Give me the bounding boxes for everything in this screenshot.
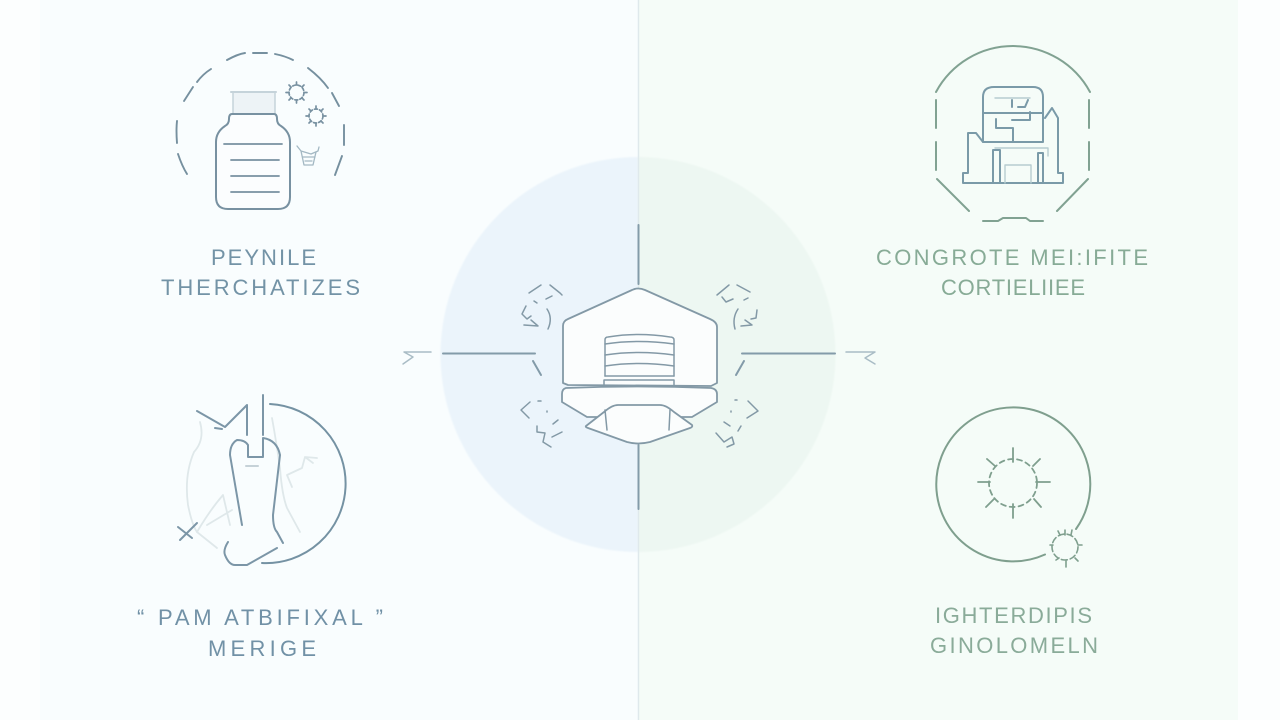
- label: bottom right: GINOLOMELN: [930, 633, 1098, 658]
- crown strokes: [197, 395, 263, 435]
- panel: left background: [40, 0, 638, 720]
- dashed ring: [176, 53, 344, 175]
- icon: jar in dashed circle: [176, 53, 344, 209]
- label: bottom left: [137, 605, 383, 661]
- gear two: [306, 106, 326, 126]
- panel: right background: [639, 0, 1238, 720]
- center divider: [638, 0, 640, 720]
- label: bottom right: [930, 603, 1098, 658]
- jar lines: [224, 144, 282, 192]
- label: top left: PEYNILE: [211, 245, 316, 270]
- ring arc: [936, 407, 1090, 561]
- label: top right: [876, 245, 1148, 300]
- building: [963, 87, 1063, 183]
- house shape: [562, 288, 717, 444]
- ring segments: [936, 46, 1090, 221]
- inner faint lines: [995, 98, 1048, 183]
- sun rays: [978, 448, 1050, 518]
- small sun: [1050, 530, 1082, 567]
- right sparks: [716, 285, 758, 447]
- label: top left: [161, 245, 360, 300]
- central sun: [989, 459, 1037, 507]
- label: top right: CONGROTE MEI:IFITE: [876, 245, 1148, 270]
- label: top right: CORTIELIIEE: [941, 275, 1085, 300]
- circle arc: [262, 404, 346, 563]
- icon: building in ring: [936, 46, 1090, 221]
- stacked block: [604, 334, 674, 430]
- panel: top right item: [876, 46, 1148, 300]
- left sparks: [521, 285, 562, 447]
- panel: bottom left item: [137, 395, 383, 661]
- gear one: [286, 82, 307, 103]
- x mark: [178, 523, 197, 540]
- icon: boot in circle: [178, 395, 346, 565]
- central diagram: [403, 225, 875, 509]
- panel: bottom right item: [930, 407, 1098, 658]
- label: bottom left: “ PAM ATBIFIXAL ”: [137, 605, 383, 630]
- small cup glyph: [297, 146, 319, 165]
- outer arrow ticks: [403, 352, 875, 364]
- central circle: [440, 157, 836, 552]
- icon: sun in circle: [936, 407, 1090, 567]
- label: bottom left: MERIGE: [208, 636, 316, 661]
- label: bottom right: IGHTERDIPIS: [935, 603, 1092, 628]
- jar neck: [231, 92, 276, 115]
- crosshair lines: [443, 225, 835, 509]
- jar body: [216, 114, 290, 209]
- label: top left: THERCHATIZES: [161, 275, 360, 300]
- faint sketch lines: [187, 418, 317, 548]
- panel: top left item: [161, 53, 360, 300]
- boot: [230, 438, 283, 543]
